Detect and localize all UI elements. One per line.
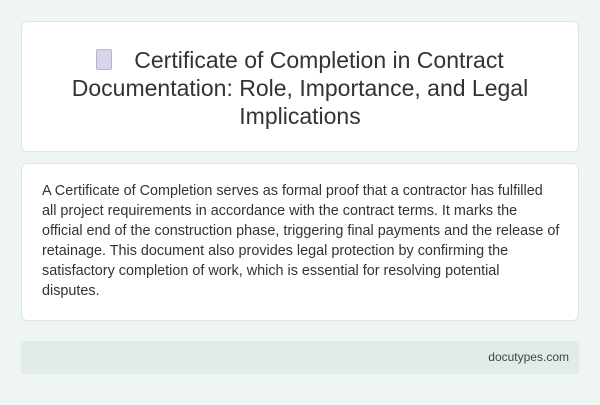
title: Certificate of Completion in Contract Documentation: Role, Importance, and Legal Implications: [72, 47, 528, 129]
text block: A Certificate of Completion serves as formal proof that a contractor has fulfilled: [42, 183, 543, 199]
text block: official end of the construction phase, triggering final payments and the release of: [42, 223, 559, 239]
panel: description: [21, 163, 579, 321]
text block: all project requirements in accordance with the contract terms. It marks the: [42, 203, 517, 219]
footer: [21, 341, 579, 374]
text block: disputes.: [42, 283, 100, 299]
icon: document: [96, 49, 112, 70]
text block: satisfactory completion of work, which is essential for resolving potential: [42, 263, 500, 279]
text block: retainage. This document also provides legal protection by confirming the: [42, 243, 508, 259]
text block: [42, 183, 560, 299]
footer text: docutypes.com: [488, 350, 569, 364]
panel: title card: [21, 21, 579, 152]
